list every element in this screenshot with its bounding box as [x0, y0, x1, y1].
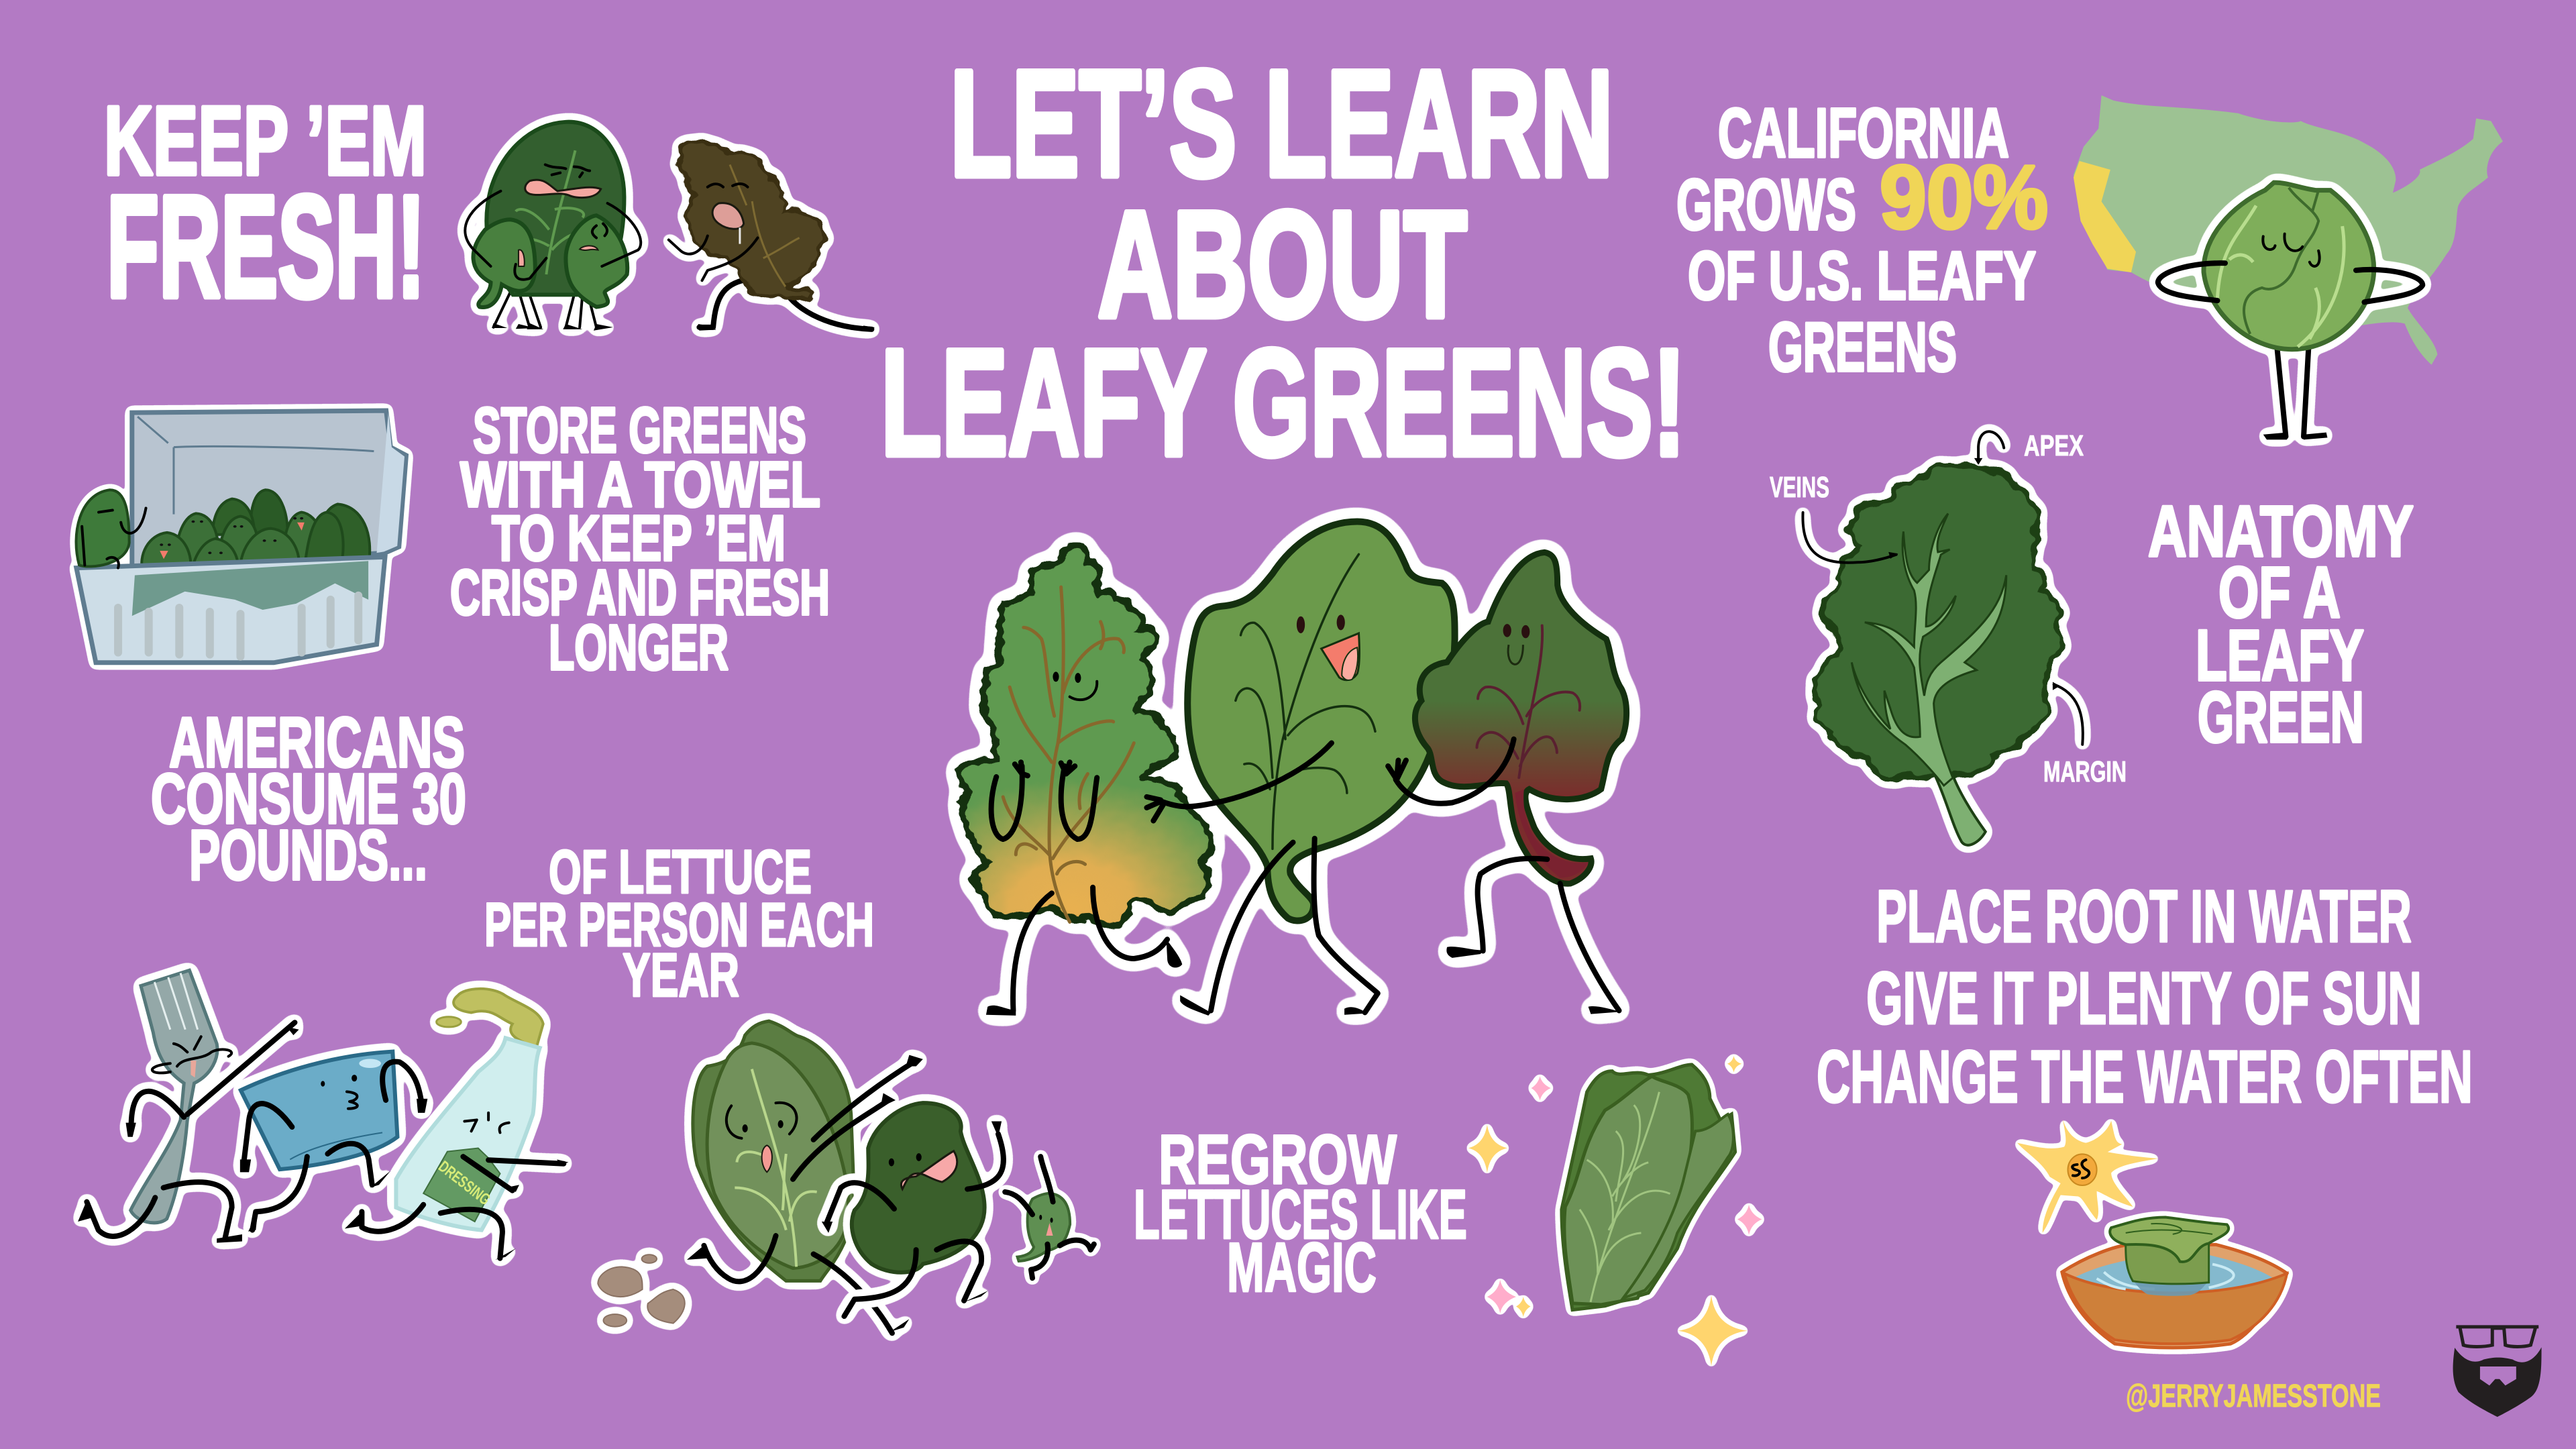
- credit: handle: @JERRYJAMESSTONE: [2126, 1379, 2381, 1414]
- hands and feet: [986, 939, 1621, 1016]
- character: screaming spinach: [822, 1103, 1004, 1318]
- character: round lettuce: [2158, 182, 2422, 439]
- heading: keep 'em fresh: [104, 86, 427, 327]
- text: california grows 90%: OF U.S. LEAFY: [1688, 237, 2036, 314]
- spinach veins: [1236, 554, 1375, 849]
- illustration: lettuce root in a bowl of water: [2062, 1218, 2287, 1348]
- text: store greens: STORE GREENS: [473, 394, 806, 466]
- title: ABOUT: [1097, 179, 1467, 349]
- text: of lettuce per person each year: OF LETTUCE: [549, 838, 812, 906]
- logo: glasses and beard: [2453, 1327, 2542, 1417]
- central characters: kale, spinach, chard walking: [959, 521, 1627, 1016]
- text: of lettuce per person each year: YEAR: [623, 941, 739, 1010]
- text: regrow lettuces like magic: MAGIC: [1227, 1229, 1377, 1307]
- text: americans consume 30 pounds: AMERICANS: [169, 703, 465, 782]
- character: running romaine: [687, 1021, 923, 1333]
- heading: anatomy of a leafy green: OF A: [2218, 551, 2341, 633]
- text: california grows 90%: GROWS: [1676, 164, 1856, 245]
- heading: keep 'em fresh: FRESH!: [107, 165, 425, 327]
- characters: scared spinach family: [465, 122, 641, 331]
- spinach face: [1297, 614, 1359, 680]
- anatomy labels: apex, veins, margin: [1770, 429, 2127, 788]
- title: LET’S LEARN: [950, 38, 1613, 208]
- text: regrow instructions: [1817, 875, 2473, 1118]
- text: regrow lettuces like magic: LETTUCES LIKE: [1134, 1176, 1467, 1254]
- lid: [132, 411, 406, 569]
- midrib and veins: [1851, 514, 2006, 786]
- heading: anatomy of a leafy green: GREEN: [2198, 676, 2364, 757]
- kale face: [1053, 672, 1097, 700]
- sparkles: [1468, 1056, 1762, 1366]
- text: americans consume 30 pounds: POUNDS...: [189, 816, 427, 895]
- towel: [132, 561, 368, 616]
- character: romaine with sparkles: [1562, 1065, 1735, 1310]
- character: fork: [78, 970, 299, 1243]
- heading: keep 'em fresh: KEEP ’EM: [104, 86, 427, 195]
- character: wilted brown leaf: [669, 141, 875, 331]
- spinach leaf: [1187, 521, 1455, 921]
- heading: anatomy of a leafy green: ANATOMY: [2148, 490, 2414, 572]
- chard veins and face: [1477, 624, 1580, 777]
- character: dressing bottle: [345, 989, 568, 1260]
- text: of lettuce per person each year: PER PERSON EACH: [484, 891, 874, 959]
- character: tiny running spinach: [1005, 1157, 1094, 1278]
- spinach in container: [142, 490, 370, 576]
- chard leaf: [1415, 552, 1627, 883]
- base: [76, 557, 385, 663]
- waving spinach: [76, 490, 129, 566]
- text: store greens: CRISP AND FRESH: [450, 557, 830, 629]
- title: [881, 38, 1686, 487]
- title: LEAFY GREENS!: [881, 317, 1686, 487]
- arrow: apex: [1974, 431, 2004, 465]
- kale leaf: [959, 545, 1211, 926]
- leaf blade: [1814, 464, 2060, 780]
- anatomy labels: apex, veins, margin: APEX: [2024, 429, 2084, 462]
- text: store greens: TO KEEP ’EM: [492, 502, 786, 574]
- text: store greens: WITH A TOWEL: [460, 449, 820, 521]
- arrow: margin: [2053, 682, 2083, 745]
- anatomy labels: apex, veins, margin: MARGIN: [2043, 755, 2127, 788]
- arrow: veins: [1803, 513, 1898, 563]
- text: california grows 90%: CALIFORNIA: [1718, 95, 2009, 172]
- text: california grows 90%: 90%: [1880, 148, 2048, 248]
- text: americans consume 30 pounds: [151, 703, 466, 895]
- text: california grows 90%: GREENS: [1768, 309, 1957, 386]
- container faces: [160, 517, 305, 559]
- diagram: kale leaf anatomy: [1803, 431, 2083, 845]
- heading: anatomy of a leafy green: LEAFY: [2196, 614, 2364, 696]
- text: store greens: [450, 394, 830, 684]
- text: california grows 90%: [1676, 95, 2048, 386]
- icon: sun: [2017, 1120, 2158, 1233]
- text: store greens: LONGER: [549, 612, 729, 684]
- stem: [1935, 775, 1986, 845]
- anatomy labels: apex, veins, margin: VEINS: [1770, 471, 1829, 504]
- text: regrow lettuces like magic: [1134, 1121, 1467, 1307]
- text: americans consume 30 pounds: CONSUME 30: [151, 759, 466, 839]
- character: dressing bottle: DRESSING: [435, 1157, 494, 1209]
- text: regrow lettuces like magic: REGROW: [1159, 1121, 1397, 1199]
- limbs: [991, 739, 1619, 1012]
- kale veins: [1003, 587, 1134, 922]
- map: united states with california highlighted: [2074, 95, 2503, 365]
- text: of lettuce per person each year: [484, 838, 874, 1010]
- heading: anatomy of a leafy green: [2148, 490, 2414, 757]
- mud clumps: [598, 1254, 685, 1327]
- character: blue bowl: [240, 1052, 427, 1232]
- illustration: storage container with spinach: [76, 411, 406, 663]
